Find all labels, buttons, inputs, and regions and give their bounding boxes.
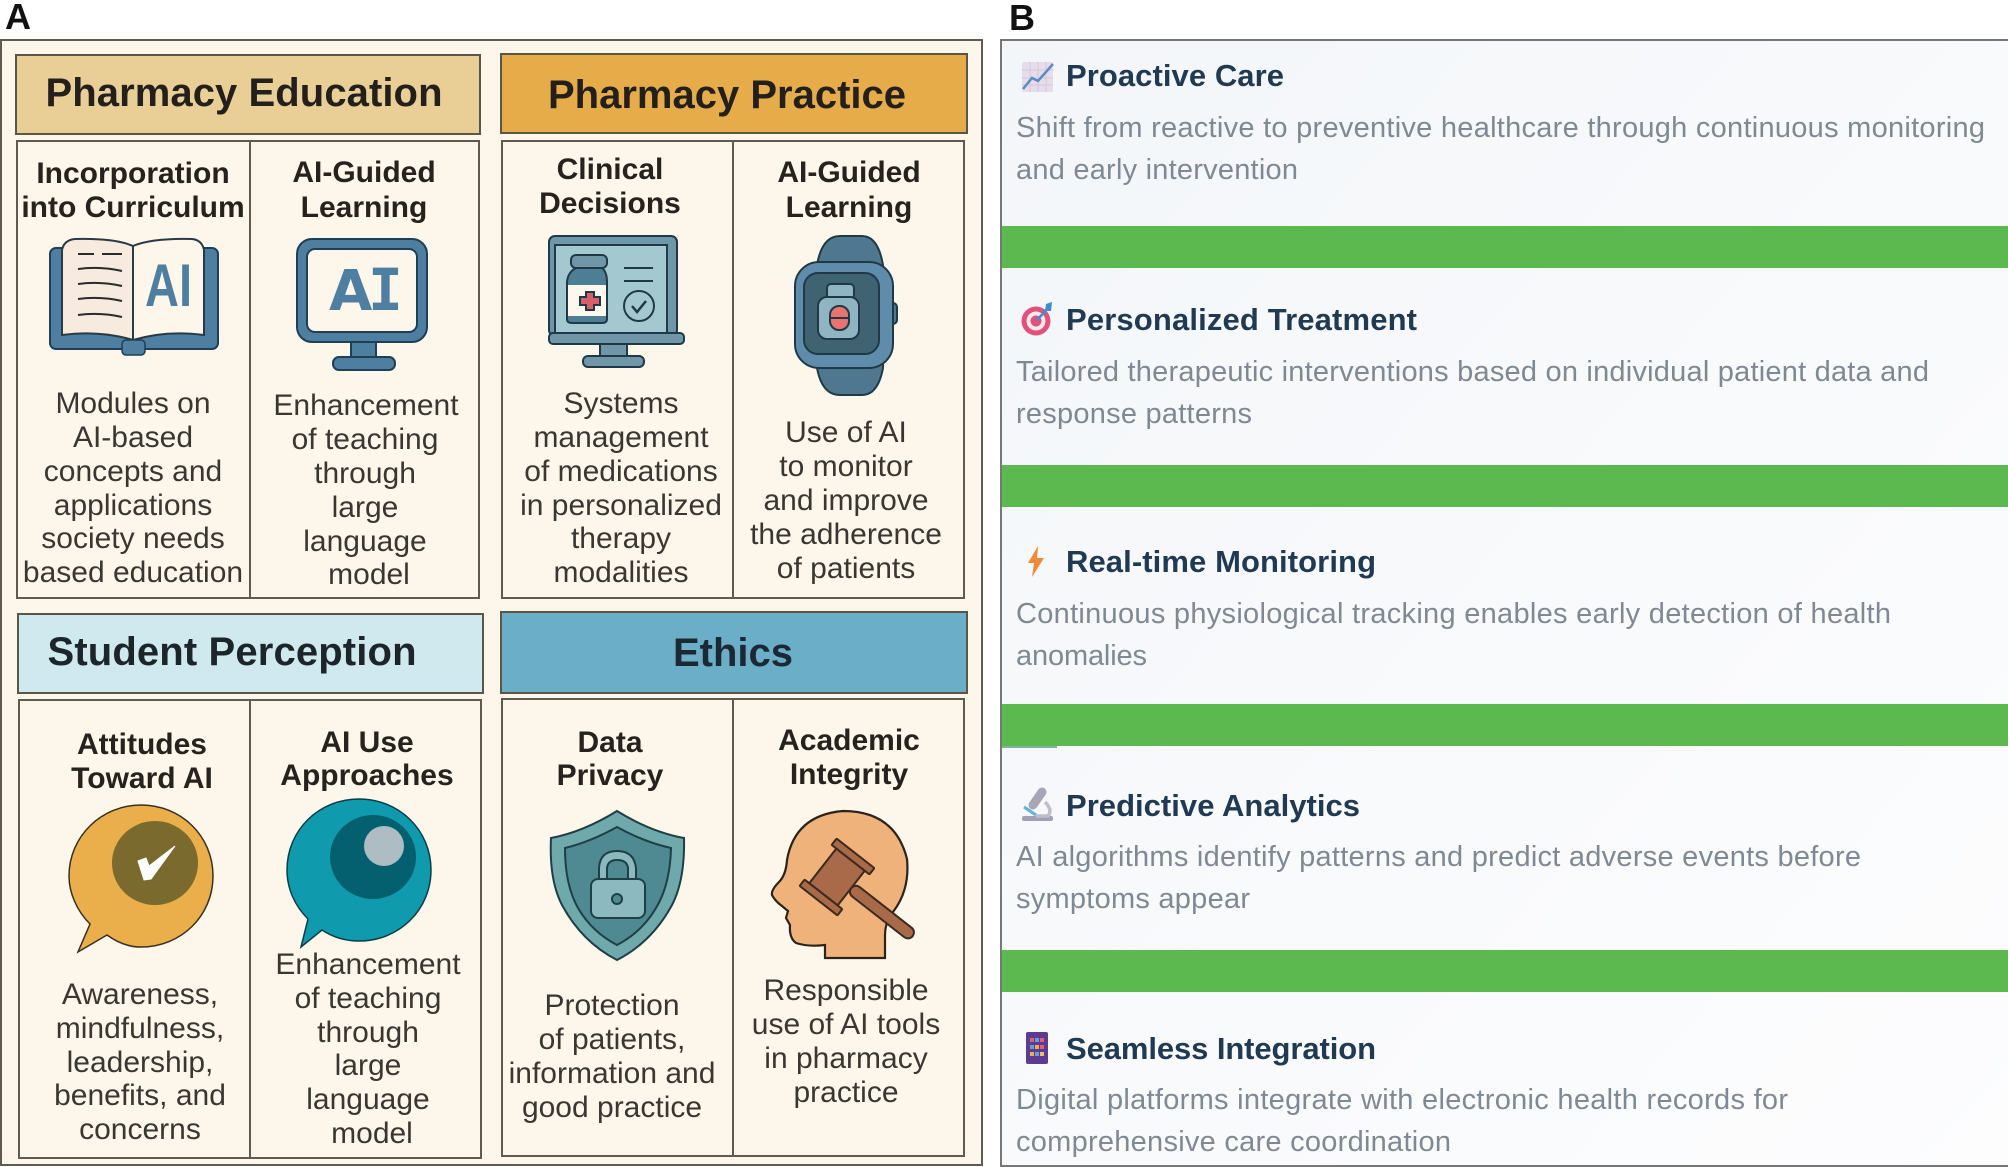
card: Clinical Decisions: Clinical bbox=[557, 153, 663, 186]
description: large bbox=[332, 491, 398, 524]
card: AI-Guided Learning bbox=[733, 141, 964, 598]
icon: smartwatch bbox=[795, 236, 897, 395]
description: based education bbox=[23, 556, 243, 589]
description: use of AI tools bbox=[752, 1008, 940, 1041]
description: AI-based bbox=[73, 421, 193, 454]
icon: speech bubble with lens bbox=[287, 799, 431, 947]
description: practice bbox=[793, 1076, 899, 1109]
item: Predictive Analytics: AI algorithms identify patterns and predict adverse events before bbox=[1016, 841, 1861, 873]
item: Real-time Monitoring: Continuous physiological tracking enables early detection of health bbox=[1016, 598, 1891, 630]
description: model bbox=[328, 558, 410, 591]
description bbox=[273, 389, 459, 591]
icon: lightning bolt bbox=[1028, 546, 1044, 577]
description: concepts and bbox=[44, 455, 222, 488]
icon: target with dart bbox=[1022, 302, 1052, 336]
item: Personalized Treatment: Tailored therapeutic interventions based on individual patient data and bbox=[1016, 356, 1929, 388]
description: Systems bbox=[563, 387, 679, 420]
description: Awareness, bbox=[62, 978, 218, 1011]
description: through bbox=[317, 1016, 419, 1049]
icon: chart increasing bbox=[1022, 62, 1053, 92]
heading: Ethics bbox=[501, 612, 967, 693]
card: Incorporation into Curriculum bbox=[17, 141, 250, 598]
heading: Pharmacy Education bbox=[16, 55, 480, 134]
description: good practice bbox=[522, 1091, 702, 1124]
description: leadership, bbox=[67, 1046, 213, 1079]
card: AI-Guided Learning: AI-Guided bbox=[777, 156, 921, 189]
icon: AI monitor: I bbox=[368, 256, 403, 324]
icon: AI monitor: A bbox=[329, 259, 373, 324]
description: Responsible bbox=[763, 974, 929, 1007]
description: of teaching bbox=[295, 982, 441, 1015]
description: society needs bbox=[41, 522, 225, 555]
description: large bbox=[335, 1049, 401, 1082]
description bbox=[520, 387, 722, 589]
heading: Pharmacy Practice: Pharmacy Practice bbox=[548, 73, 906, 117]
description bbox=[509, 989, 715, 1124]
description: Use of AI bbox=[785, 416, 907, 449]
description: Modules on bbox=[55, 387, 211, 420]
item: Personalized Treatment: response patterns bbox=[1016, 398, 1252, 430]
item: Seamless Integration bbox=[1016, 1031, 1788, 1158]
description: the adherence bbox=[750, 518, 942, 551]
description: benefits, and bbox=[54, 1079, 226, 1112]
description bbox=[752, 974, 940, 1109]
panel B: benefits list bbox=[1001, 40, 2008, 1166]
heading: Pharmacy Practice bbox=[501, 54, 967, 133]
description bbox=[275, 948, 461, 1150]
card: Attitudes Toward AI: Attitudes bbox=[77, 728, 207, 761]
item: Real-time Monitoring: Real-time Monitoring bbox=[1066, 544, 1376, 579]
description: modalities bbox=[553, 556, 689, 589]
heading: Student Perception bbox=[18, 614, 483, 693]
description: through bbox=[314, 457, 416, 490]
card: Attitudes Toward AI: Toward AI bbox=[71, 762, 213, 795]
section: Pharmacy Practice bbox=[501, 54, 967, 598]
section: Pharmacy Education bbox=[16, 55, 480, 598]
item: Seamless Integration: Seamless Integration bbox=[1066, 1031, 1376, 1066]
card: AI-Guided Learning: AI-Guided bbox=[292, 156, 436, 189]
description: therapy bbox=[571, 522, 671, 555]
description: of medications bbox=[524, 455, 718, 488]
card: Academic Integrity bbox=[733, 699, 964, 1156]
description: management bbox=[533, 421, 709, 454]
description: concerns bbox=[79, 1113, 201, 1146]
description: language bbox=[303, 525, 427, 558]
section: Ethics bbox=[501, 612, 967, 1156]
description: of teaching bbox=[292, 423, 438, 456]
description: language bbox=[306, 1083, 430, 1116]
description: information and bbox=[509, 1057, 715, 1090]
item: Predictive Analytics bbox=[1016, 788, 1861, 915]
section: Student Perception bbox=[18, 614, 483, 1158]
card: AI Use Approaches: AI Use bbox=[320, 726, 414, 759]
item: Real-time Monitoring: anomalies bbox=[1016, 640, 1147, 672]
card: AI-Guided Learning: Learning bbox=[301, 191, 427, 224]
item: Personalized Treatment bbox=[1016, 302, 1929, 430]
description: to monitor bbox=[779, 450, 913, 483]
description: applications bbox=[54, 489, 212, 522]
item: Personalized Treatment: Personalized Treatment bbox=[1066, 302, 1417, 337]
card: Incorporation into Curriculum: into Curriculum bbox=[21, 191, 245, 224]
icon: open book with AI bbox=[50, 239, 218, 355]
description: Enhancement bbox=[275, 948, 461, 981]
card: AI Use Approaches: Approaches bbox=[280, 759, 454, 792]
card: Clinical Decisions bbox=[502, 141, 733, 598]
item: Seamless Integration: comprehensive care coordination bbox=[1016, 1126, 1451, 1158]
heading: Pharmacy Education: Pharmacy Education bbox=[46, 71, 442, 115]
icon: app grid bbox=[1026, 1032, 1048, 1064]
card: Data Privacy: Data bbox=[577, 726, 643, 759]
description bbox=[54, 978, 226, 1146]
heading: Student Perception: Student Perception bbox=[48, 630, 416, 674]
card: Data Privacy: Privacy bbox=[557, 759, 664, 792]
icon: computer with medication bbox=[549, 236, 684, 367]
description: Enhancement bbox=[273, 389, 459, 422]
item: Seamless Integration: Digital platforms integrate with electronic health records for bbox=[1016, 1084, 1788, 1116]
card: Academic Integrity: Academic bbox=[778, 724, 920, 757]
card: Academic Integrity: Integrity bbox=[790, 758, 908, 791]
description: mindfulness, bbox=[56, 1012, 224, 1045]
card: AI Use Approaches bbox=[250, 700, 481, 1158]
icon: speech bubble with check bbox=[69, 805, 213, 952]
description: of patients, bbox=[539, 1023, 685, 1056]
description: of patients bbox=[777, 552, 915, 585]
card: AI-Guided Learning bbox=[250, 141, 479, 598]
description: in pharmacy bbox=[764, 1042, 928, 1075]
description: and improve bbox=[763, 484, 929, 517]
item: Real-time Monitoring bbox=[1016, 544, 1891, 672]
description bbox=[23, 387, 243, 589]
card: Attitudes Toward AI bbox=[19, 700, 250, 1158]
icon: AI monitor bbox=[297, 239, 427, 370]
item: Predictive Analytics: symptoms appear bbox=[1016, 883, 1250, 915]
heading: Ethics: Ethics bbox=[673, 631, 793, 675]
item: Predictive Analytics: Predictive Analytics bbox=[1066, 788, 1360, 823]
icon: open book with AI: AI bbox=[145, 252, 192, 319]
item: Proactive Care: Proactive Care bbox=[1066, 58, 1284, 93]
card: AI-Guided Learning: Learning bbox=[786, 191, 912, 224]
description: model bbox=[331, 1117, 413, 1150]
card: Incorporation into Curriculum: Incorporation bbox=[36, 157, 230, 190]
icon: shield with lock bbox=[551, 811, 684, 960]
description bbox=[750, 416, 942, 585]
description: in personalized bbox=[520, 489, 722, 522]
panel A: AI in pharmacy framework bbox=[1, 40, 982, 1165]
icon: microscope bbox=[1022, 792, 1053, 821]
divider bars bbox=[1002, 226, 2008, 992]
item: Proactive Care: Shift from reactive to preventive healthcare through continuous monitoring bbox=[1016, 112, 1985, 144]
card: Data Privacy bbox=[502, 699, 733, 1156]
item: Proactive Care bbox=[1016, 58, 1985, 186]
item: Proactive Care: and early intervention bbox=[1016, 154, 1298, 186]
icon: head with gavel bbox=[772, 811, 931, 960]
card: Clinical Decisions: Decisions bbox=[539, 187, 681, 220]
description: Protection bbox=[544, 989, 680, 1022]
